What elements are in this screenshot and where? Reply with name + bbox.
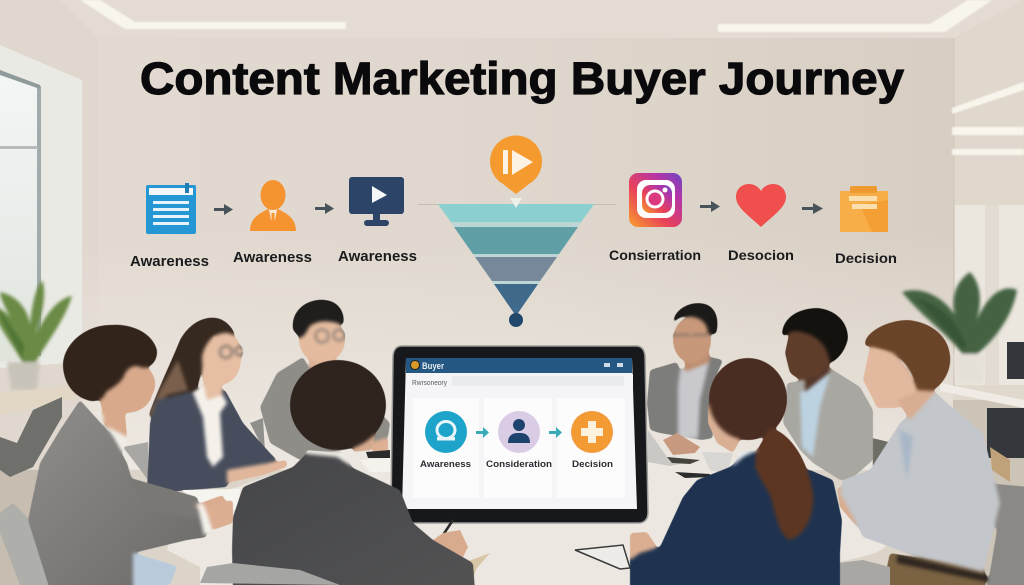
screen step: decision: Decision (572, 459, 613, 470)
step: awareness person icon (233, 180, 312, 266)
step: heart icon (728, 184, 794, 263)
arrow (476, 427, 489, 438)
step: awareness document icon (130, 183, 209, 270)
icon: camera app (629, 173, 682, 227)
arrow (802, 203, 823, 214)
person: man with glasses, back left (260, 300, 390, 460)
person: woman from behind, right (630, 358, 842, 585)
search row (406, 374, 633, 388)
search row: Rwrsoneory (412, 380, 447, 387)
tablet screen (402, 358, 637, 509)
person: woman with glasses (147, 318, 287, 492)
icon: person (250, 180, 296, 231)
arrow (549, 427, 562, 438)
person: man from behind, center (232, 360, 475, 585)
screen step: awareness (420, 411, 471, 470)
app header: Buyer (422, 361, 444, 371)
plant left (0, 280, 72, 390)
step: awareness video icon (338, 177, 417, 265)
label: Decision (835, 250, 897, 266)
step: decision folder icon (835, 186, 897, 266)
plant right (902, 272, 1017, 384)
screen step: consideration (486, 411, 552, 470)
window on left wall (0, 45, 82, 368)
screen step: decision (571, 411, 613, 470)
screen step: awareness: Awareness (420, 459, 471, 470)
icon: monitor play (349, 177, 404, 226)
pen and writing hand (433, 520, 468, 557)
icon: document (146, 183, 196, 234)
tablet (391, 346, 648, 523)
title: Content Marketing Buyer Journey (140, 53, 904, 104)
funnel (418, 204, 616, 327)
chairs behind table (123, 418, 893, 480)
icon: play pin above funnel (490, 135, 542, 208)
arrow (700, 201, 720, 212)
app header (406, 358, 632, 373)
chair center foreground (200, 563, 340, 585)
person: curly man, right (837, 320, 1024, 585)
screen step: consideration: Consideration (486, 459, 552, 470)
table (167, 450, 887, 585)
step: consideration social icon (609, 173, 701, 263)
tablet frame (391, 346, 648, 523)
chair left foreground (0, 503, 53, 585)
ceiling lights (80, 0, 1024, 155)
person: curly man in front left (28, 325, 233, 585)
cards (413, 398, 625, 498)
label: Consierration (609, 247, 701, 263)
arrow (315, 203, 334, 214)
laptops and phone (648, 430, 733, 478)
side tables and chairs (0, 342, 1024, 482)
label: Awareness (338, 249, 417, 265)
label: Awareness (130, 254, 209, 270)
person: man with glasses, back right (647, 303, 723, 440)
person: person with dark curly hair (782, 308, 873, 480)
label: Awareness (233, 250, 312, 266)
icon: folder note (840, 186, 888, 232)
arrow (214, 204, 233, 215)
chair right foreground (753, 560, 890, 585)
icon: heart (736, 184, 786, 227)
label: Desocion (728, 247, 794, 263)
